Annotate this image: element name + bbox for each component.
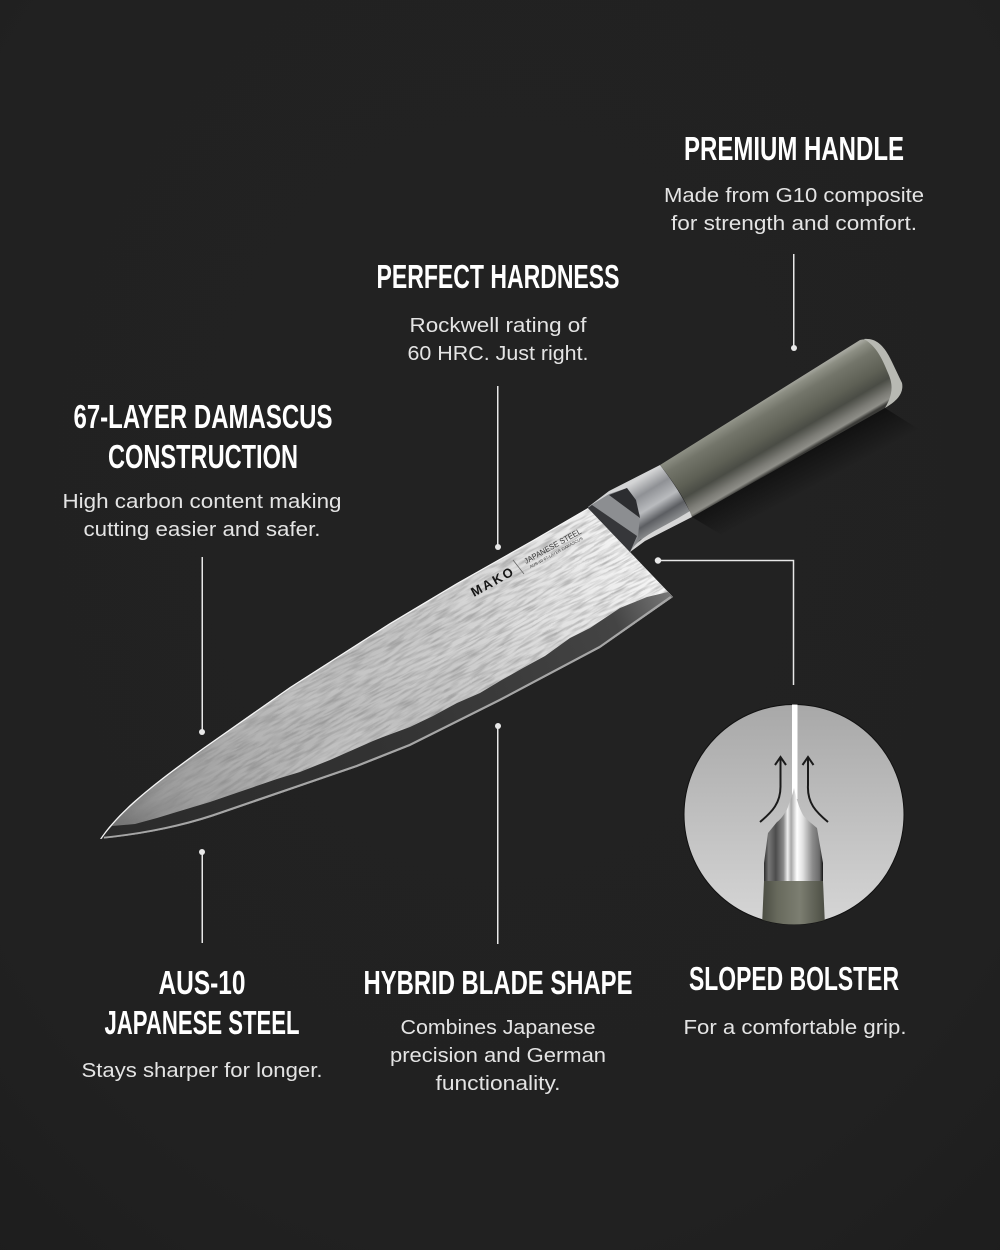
logo subtext: JAPANESE STEEL	[523, 527, 583, 566]
heading and text: damascus construction: cutting easier and safer.	[84, 519, 320, 541]
arrow left	[760, 757, 786, 822]
heading and text: hybrid blade shape: functionality.	[436, 1073, 560, 1095]
heading and text: aus-10 steel	[82, 964, 322, 1082]
logo: MAKO	[468, 564, 516, 600]
arrow right	[802, 757, 828, 822]
handle butt cap	[864, 339, 902, 408]
bolster	[588, 465, 692, 552]
leader: premium handle	[791, 254, 797, 351]
heading and text: hybrid blade shape: precision and German	[390, 1045, 606, 1067]
heading and text: damascus construction: 67-LAYER DAMASCUS	[74, 398, 332, 435]
heading and text: aus-10 steel: Stays sharper for longer.	[82, 1060, 322, 1082]
blade	[100, 508, 673, 839]
leader: aus-10	[199, 849, 205, 943]
edge highlight	[104, 597, 671, 838]
heading and text: damascus construction	[62, 398, 342, 541]
heading and text: perfect hardness: Rockwell rating of	[410, 315, 587, 337]
leader: hybrid blade	[495, 723, 501, 944]
heading and text: sloped bolster: SLOPED BOLSTER	[689, 960, 899, 997]
leader: perfect hardness	[495, 386, 501, 550]
heading and text: aus-10 steel: JAPANESE STEEL	[104, 1004, 300, 1041]
heading and text: perfect hardness: PERFECT HARDNESS	[376, 258, 620, 295]
logo divider	[513, 560, 524, 574]
handle	[660, 339, 902, 517]
heading and text: damascus construction: CONSTRUCTION	[108, 438, 298, 475]
olive handle	[762, 881, 825, 926]
heading and text: hybrid blade shape: HYBRID BLADE SHAPE	[364, 964, 632, 1001]
heading and text: perfect hardness	[376, 258, 620, 365]
detail circle: sloped bolster	[684, 704, 904, 926]
heading and text: damascus construction: High carbon content making	[62, 491, 342, 513]
heading and text: aus-10 steel: AUS-10	[158, 964, 246, 1001]
heading and text: perfect hardness: 60 HRC. Just right.	[408, 343, 588, 365]
heading and text: premium handle	[664, 130, 924, 235]
heading and text: hybrid blade shape: Combines Japanese	[400, 1017, 596, 1039]
heading and text: premium handle: Made from G10 composite	[664, 185, 924, 207]
heading and text: sloped bolster: For a comfortable grip.	[684, 1017, 906, 1039]
heading and text: premium handle: PREMIUM HANDLE	[684, 130, 904, 167]
leader: damascus	[199, 557, 205, 735]
thin blade	[792, 704, 798, 799]
steel bolster	[764, 788, 823, 881]
leader: sloped bolster	[656, 558, 794, 685]
spine highlight	[100, 508, 588, 839]
handle shadow	[692, 408, 920, 540]
hardened dark edge	[100, 592, 673, 839]
heading and text: sloped bolster	[684, 960, 906, 1039]
logo subtext: AUS-10 67-LAYER DAMASCUS	[529, 536, 584, 569]
heading and text: hybrid blade shape	[364, 964, 632, 1095]
damascus pattern	[150, 509, 670, 815]
knife	[100, 338, 902, 839]
heading and text: premium handle: for strength and comfort.	[671, 213, 917, 235]
